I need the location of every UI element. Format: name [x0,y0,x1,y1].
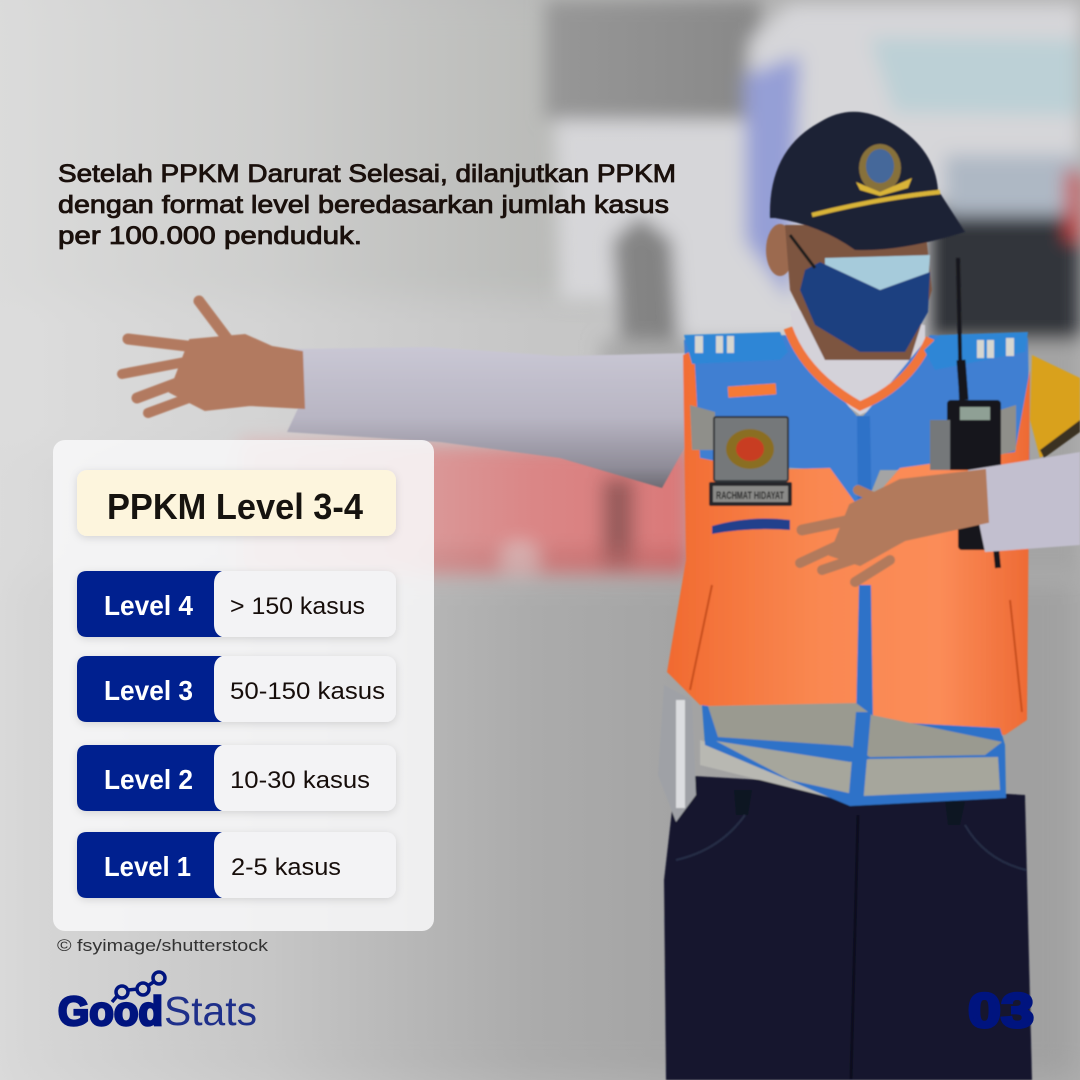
officer: outstretched hand [122,301,304,413]
photo credit: © fsyimage/shutterstock [57,936,269,955]
logo: GoodStats [58,972,257,1034]
officer: vest collar [788,328,930,406]
white left fade overlay [0,0,760,1080]
intro text: Setelah PPKM Darurat Selesai, dilanjutkan PPKM [58,160,676,188]
row: Level 1 [77,832,396,898]
logo: GoodStats: Good [58,988,163,1034]
row: Level 3: 50-150 kasus [230,678,385,705]
officer: hand on chest [800,470,988,582]
logo line graph icon [112,972,165,1002]
intro text [58,160,676,250]
officer: cap [770,112,965,250]
panel background [53,440,434,931]
officer: name tag: RACHMAT HIDAYAT [716,490,784,502]
officer: grey reflective band [690,405,1016,455]
traffic officer photo [122,112,1080,1080]
row: Level 2: 10-30 kasus [230,767,370,794]
officer: shoulder epaulettes [684,332,1028,370]
heading: PPKM Level 3-4: PPKM Level 3-4 [107,486,363,527]
row: Level 3 [77,656,396,722]
officer: blue centre zip strip [856,416,873,720]
officer: left sleeve [287,347,700,488]
row: Level 4: Level 4 [104,590,193,621]
row: Level 1: Level 1 [104,851,191,882]
row: Level 2: Level 2 [104,764,193,795]
intro text: per 100.000 penduduk. [58,222,362,250]
officer: chest pocket [712,518,790,534]
officer: trousers [664,775,1032,1080]
row: Level 2 [77,745,396,811]
officer: name tag [709,482,792,506]
officer: face mask [790,235,930,352]
officer: chest badge [714,383,788,481]
page number: 03 [968,985,1034,1038]
row: Level 1: 2-5 kasus [231,854,341,881]
officer: reflective waist band [702,703,1006,806]
officer: blue vest yoke [684,335,1030,515]
intro text: dengan format level beredasarkan jumlah kasus [58,191,669,219]
officer: radio and antenna [930,258,1001,568]
officer: right sleeve [968,452,1080,552]
officer: head and neck [766,224,932,415]
panel: PPKM levels [53,440,434,931]
heading: PPKM Level 3-4 [77,470,396,536]
officer: orange mesh vest [667,350,1030,735]
row: Level 3: Level 3 [104,675,193,706]
officer: belt pouch [658,685,1000,822]
logo: GoodStats: Stats [164,988,257,1034]
officer: yellow armband [1030,355,1080,458]
row: Level 4 [77,571,396,637]
row: Level 4: > 150 kasus [230,593,365,620]
